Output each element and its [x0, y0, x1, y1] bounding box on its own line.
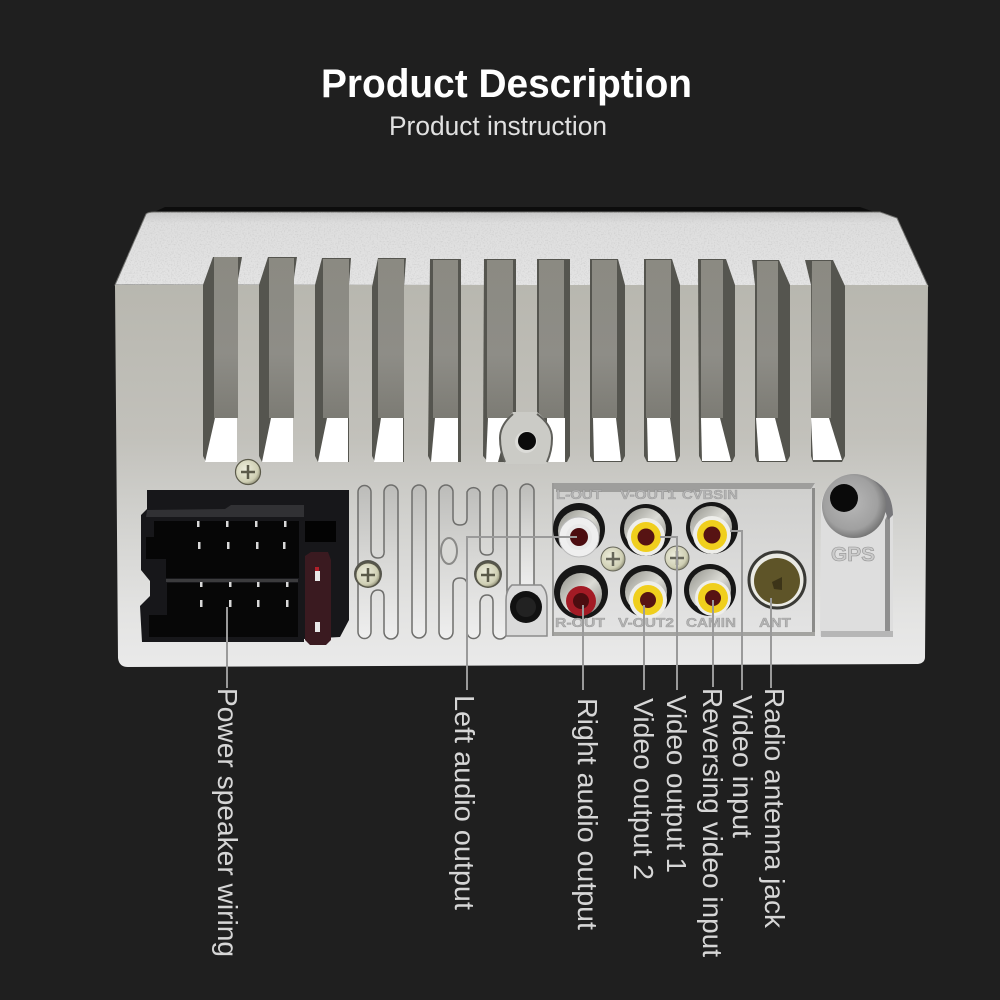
RCA: video output 1 (yellow): [620, 504, 672, 556]
GPS connector: [820, 474, 893, 637]
panel port markings: [555, 487, 791, 630]
vent recesses: [358, 484, 534, 639]
top chassis edge: [150, 207, 880, 214]
panel port markings: ANT: [759, 615, 791, 630]
headphone-style jack: [506, 585, 547, 636]
label: reversing video input: Reversing video input: [697, 688, 728, 957]
subtitle: Product instruction: [389, 111, 607, 141]
oval vent hole: [441, 538, 457, 564]
red fuse block: [305, 552, 331, 645]
label: video input: Video input: [727, 695, 758, 838]
label: radio antenna jack: Radio antenna jack: [759, 688, 790, 929]
RCA: video output 2 (yellow): [620, 565, 672, 619]
top face of the housing: [115, 212, 928, 286]
label: video output 1: Video output 1: [661, 695, 692, 873]
wiring harness connector: [140, 490, 349, 645]
panel port markings: CAMIN: [686, 615, 736, 630]
title: Product Description: [321, 62, 692, 106]
label: video output 2: Video output 2: [628, 698, 659, 880]
panel port markings: L-OUT: [556, 487, 602, 502]
panel port markings: V-OUT2: [618, 615, 674, 630]
RCA: reversing video input (yellow): [684, 564, 736, 616]
RCA: left audio output (white): [553, 503, 605, 557]
panel port markings: R-OUT: [555, 615, 605, 630]
label: left audio output: Left audio output: [449, 695, 480, 910]
GPS connector: GPS: [831, 544, 875, 566]
RCA: right audio output (red): [554, 565, 608, 619]
label: power speaker wiring: Power speaker wiring: [212, 688, 243, 957]
panel port markings: V-OUT1: [620, 487, 676, 502]
screws on panel: [601, 546, 689, 571]
leader lines: [227, 531, 771, 690]
panel port markings: CVBSIN: [682, 487, 738, 502]
top face speckle texture: [115, 212, 928, 286]
device: car stereo rear panel: [115, 207, 928, 667]
heat sink slots: [203, 257, 845, 462]
connector recess panel: [552, 483, 815, 636]
radio antenna jack: [749, 552, 805, 608]
RCA: video input (yellow): [686, 502, 738, 554]
label: right audio output: Right audio output: [572, 698, 603, 930]
screws on the housing: [236, 460, 502, 588]
front face of the housing: [115, 285, 928, 667]
mounting hole: [500, 412, 552, 464]
